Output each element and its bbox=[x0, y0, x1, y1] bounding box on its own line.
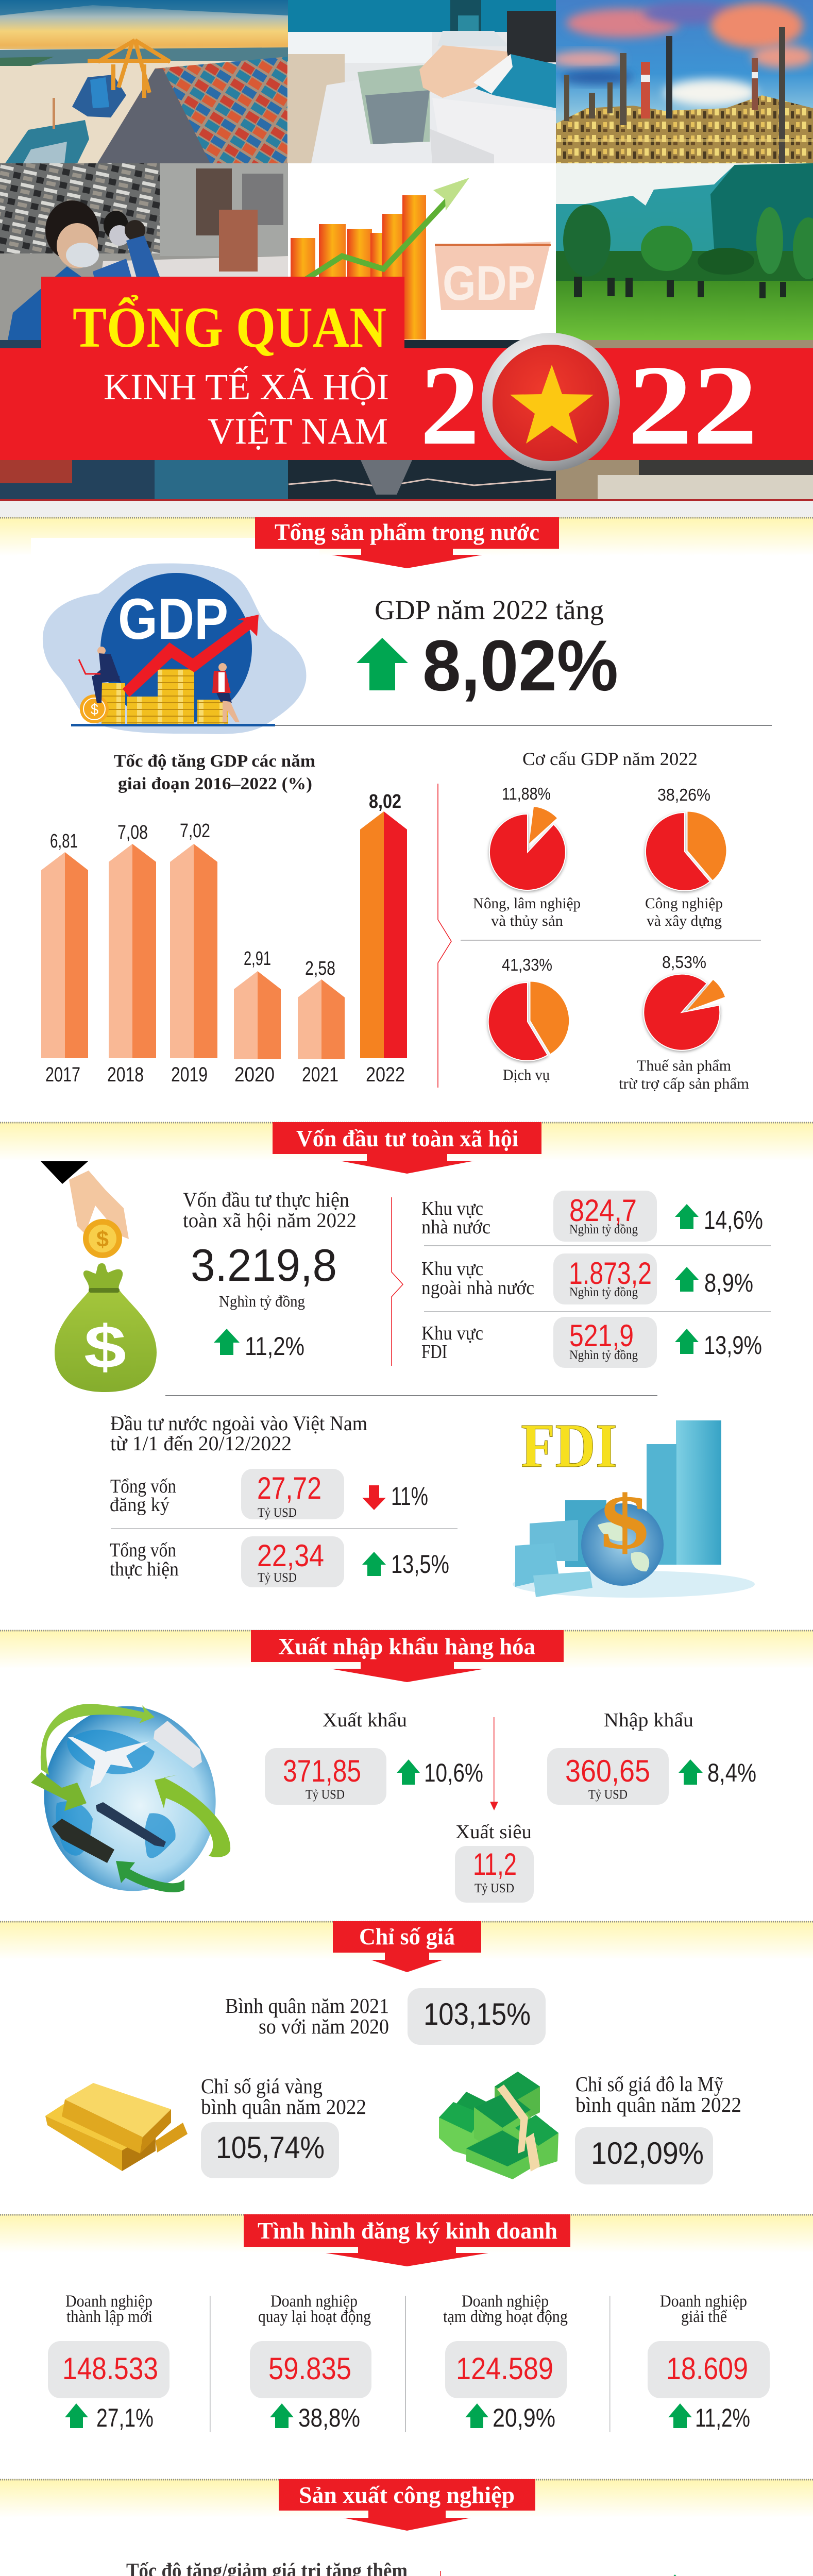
title band bbox=[0, 277, 813, 460]
block: exports: Xuất khẩu bbox=[323, 1709, 407, 1731]
row: FDI sector: 521,9 bbox=[569, 1318, 634, 1353]
row: state sector: Nghìn tỷ đồng bbox=[569, 1223, 638, 1236]
pie: industry: và xây dựng bbox=[647, 912, 722, 929]
illustration: FDI bars and globe bbox=[513, 1411, 755, 1598]
column: dissolved businesses: giải thể bbox=[681, 2308, 727, 2326]
bar: 2020 bbox=[234, 971, 281, 1059]
heading: GDP structure: Cơ cấu GDP năm 2022 bbox=[522, 749, 698, 769]
bar: 2022 bbox=[360, 811, 407, 1058]
bar values: 6,81 bbox=[50, 831, 78, 852]
bracket divider bbox=[392, 1197, 403, 1366]
bar values: 2,58 bbox=[305, 958, 335, 979]
block: imports: Nhập khẩu bbox=[604, 1709, 693, 1731]
pie: industry bbox=[645, 785, 726, 929]
row: FDI sector: 13,9% bbox=[704, 1331, 762, 1360]
pie: services: Dịch vụ bbox=[503, 1066, 550, 1083]
illustration: GDP growth with coins and people: $ bbox=[91, 701, 98, 718]
icon: flag medallion bbox=[482, 333, 620, 471]
column: returning businesses: 59.835 bbox=[268, 2351, 351, 2386]
column: suspended businesses: 20,9% bbox=[493, 2403, 555, 2432]
bar: 2017 bbox=[41, 852, 88, 1058]
column: suspended businesses: 124.589 bbox=[456, 2351, 553, 2386]
illustration: GDP growth with coins and people bbox=[43, 564, 306, 734]
block: gold index bbox=[201, 2074, 366, 2178]
photo: GDP chart bbox=[291, 178, 551, 340]
illustration: FDI bars and globe: $ bbox=[600, 1480, 649, 1565]
section heading: GDP: Tổng sản phẩm trong nước bbox=[275, 519, 539, 545]
column: returning businesses: 38,8% bbox=[298, 2403, 360, 2432]
section heading: industry: Sản xuất công nghiệp bbox=[299, 2482, 515, 2508]
section heading: trade bbox=[0, 1630, 813, 1682]
value: total investment: 3.219,8 bbox=[191, 1240, 337, 1291]
block: dollar index: Chỉ số giá đô la Mỹ bbox=[575, 2072, 723, 2096]
block: average CPI: 103,15% bbox=[424, 1997, 531, 2031]
pie: product taxes: Thuế sản phẩm bbox=[637, 1057, 731, 1074]
photo: container port bbox=[0, 0, 288, 163]
block: exports bbox=[265, 1709, 483, 1805]
block: imports bbox=[547, 1709, 756, 1805]
block: dollar index: bình quân năm 2022 bbox=[575, 2093, 741, 2116]
column: returning businesses: quay lại hoạt động bbox=[258, 2308, 371, 2326]
light strip under banner bbox=[0, 501, 813, 517]
block: dollar index: 102,09% bbox=[591, 2136, 704, 2171]
title: tong quan: TỔNG QUAN bbox=[73, 295, 386, 360]
icon: hand dropping coin into money bag: $ bbox=[84, 1313, 126, 1381]
pie: product taxes: trừ trợ cấp sản phẩm bbox=[619, 1075, 749, 1092]
row: disbursed capital: Tỷ USD bbox=[258, 1571, 297, 1585]
pie: industry: 38,26% bbox=[657, 785, 710, 804]
column: dissolved businesses: 18.609 bbox=[666, 2351, 748, 2386]
row: non-state sector: ngoài nhà nước bbox=[421, 1277, 534, 1299]
column: suspended businesses: Doanh nghiệp bbox=[462, 2292, 549, 2311]
column: new businesses: 148.533 bbox=[62, 2351, 158, 2386]
block: exports: 10,6% bbox=[424, 1758, 483, 1787]
row: non-state sector: 1.873,2 bbox=[569, 1256, 652, 1291]
text: GDP 2022 label: GDP năm 2022 tăng bbox=[375, 595, 604, 625]
section heading: business registration bbox=[0, 2214, 813, 2266]
section: industrial production bbox=[0, 2479, 813, 2576]
row: mining bbox=[487, 2573, 750, 2576]
text: FDI title: từ 1/1 đến 20/12/2022 bbox=[110, 1432, 292, 1455]
bar: 2019 bbox=[170, 844, 217, 1058]
bracket divider bbox=[438, 784, 451, 1088]
column: returning businesses: Doanh nghiệp bbox=[270, 2292, 358, 2311]
row: disbursed capital: 22,34 bbox=[257, 1538, 324, 1573]
icon: gold bars bbox=[45, 2083, 188, 2171]
text: FDI title: Đầu tư nước ngoài vào Việt Nam bbox=[110, 1412, 367, 1435]
block: exports: Tỷ USD bbox=[306, 1788, 345, 1802]
pie: services: 41,33% bbox=[502, 955, 552, 974]
section: total investment bbox=[0, 1122, 813, 1598]
row: registered capital: đăng ký bbox=[110, 1494, 170, 1516]
block: trade surplus: 11,2 bbox=[473, 1847, 517, 1882]
icon: hand dropping coin into money bag: $ bbox=[96, 1227, 109, 1252]
section: business registration bbox=[0, 2214, 813, 2432]
year labels: 2022 bbox=[366, 1063, 405, 1086]
row: non-state sector: Nghìn tỷ đồng bbox=[569, 1285, 638, 1299]
row: non-state sector bbox=[421, 1253, 753, 1304]
section heading: price index bbox=[0, 1921, 813, 1972]
block: gold index: Chỉ số giá vàng bbox=[201, 2074, 323, 2098]
row: FDI sector bbox=[421, 1317, 762, 1368]
column: suspended businesses: tạm dừng hoạt động bbox=[443, 2308, 568, 2326]
row: disbursed capital: thực hiện bbox=[110, 1558, 179, 1580]
bar values: 2,91 bbox=[244, 948, 271, 970]
row: disbursed capital bbox=[110, 1536, 449, 1587]
section heading: GDP bbox=[0, 517, 813, 568]
pie: product taxes: 8,53% bbox=[662, 953, 706, 972]
photo: rice field and mountains bbox=[556, 163, 813, 340]
value: investment growth: 11,2% bbox=[245, 1332, 304, 1361]
unit: total investment: Nghìn tỷ đồng bbox=[219, 1292, 305, 1310]
row: FDI sector: FDI bbox=[421, 1341, 447, 1363]
illustration: GDP growth with coins and people: GDP bbox=[118, 587, 228, 651]
year labels: 2020 bbox=[234, 1063, 275, 1086]
year labels bbox=[45, 1063, 405, 1086]
arrow: to trade surplus bbox=[490, 1717, 498, 1810]
column: dissolved businesses: Doanh nghiệp bbox=[660, 2292, 747, 2311]
bracket divider bbox=[441, 2571, 455, 2576]
block: average CPI: Bình quân năm 2021 bbox=[225, 1994, 389, 2018]
photo: garment factory workers bbox=[0, 163, 288, 340]
bar chart: GDP growth by year bbox=[41, 791, 407, 1086]
row: FDI sector: Nghìn tỷ đồng bbox=[569, 1348, 638, 1362]
column: suspended businesses bbox=[443, 2292, 568, 2432]
bar values: 7,02 bbox=[180, 820, 210, 842]
row: state sector: nhà nước bbox=[421, 1216, 490, 1238]
block: imports: 8,4% bbox=[707, 1758, 756, 1787]
block: trade surplus: Xuất siêu bbox=[455, 1821, 532, 1843]
block: trade surplus: Tỷ USD bbox=[475, 1882, 514, 1895]
year: last digits: 22 bbox=[628, 342, 758, 469]
pie: services bbox=[488, 955, 569, 1083]
year labels: 2021 bbox=[302, 1063, 338, 1086]
block: average CPI bbox=[225, 1988, 546, 2045]
column: new businesses: 27,1% bbox=[96, 2403, 154, 2432]
column: returning businesses bbox=[250, 2292, 371, 2432]
section heading: investment: Vốn đầu tư toàn xã hội bbox=[296, 1125, 518, 1151]
column: new businesses bbox=[48, 2292, 170, 2432]
text: investment title: Vốn đầu tư thực hiện bbox=[183, 1188, 349, 1211]
row: state sector: 14,6% bbox=[704, 1206, 763, 1234]
text: investment title bbox=[183, 1188, 357, 1232]
block: exports: 371,85 bbox=[283, 1754, 361, 1788]
heading: bar chart bbox=[114, 752, 315, 793]
icon: up arrow bbox=[214, 1329, 240, 1355]
rule under GDP headline bbox=[71, 724, 772, 726]
year labels: 2019 bbox=[171, 1063, 208, 1086]
pie: agriculture: và thủy sản bbox=[491, 912, 563, 929]
row: registered capital: 11% bbox=[391, 1482, 428, 1511]
heading: bar chart: Tốc độ tăng GDP các năm bbox=[114, 752, 315, 771]
bar values: 7,08 bbox=[117, 822, 148, 843]
column: new businesses: thành lập mới bbox=[66, 2308, 153, 2326]
year labels: 2017 bbox=[45, 1063, 80, 1086]
pie: agriculture bbox=[473, 784, 581, 929]
row: FDI sector: Khu vực bbox=[421, 1323, 483, 1344]
pie: product taxes bbox=[619, 953, 749, 1092]
row: non-state sector: 8,9% bbox=[704, 1268, 753, 1297]
icon: hand dropping coin into money bag bbox=[41, 1161, 157, 1392]
title: viet nam: VIỆT NAM bbox=[208, 411, 388, 452]
block: imports: Tỷ USD bbox=[588, 1788, 628, 1802]
row: disbursed capital: 13,5% bbox=[391, 1550, 449, 1579]
section heading: industry bbox=[0, 2479, 813, 2531]
icon: dollar stacks bbox=[439, 2072, 558, 2179]
illustration: globe with plane, truck and ships bbox=[27, 1690, 233, 1907]
column: dissolved businesses bbox=[648, 2292, 770, 2432]
bar values bbox=[50, 791, 401, 979]
illustration: FDI bars and globe: FDI bbox=[521, 1411, 617, 1481]
section: GDP bbox=[0, 517, 813, 1092]
bar: 2021 bbox=[298, 979, 345, 1059]
row: disbursed capital: Tổng vốn bbox=[110, 1539, 176, 1561]
block: imports: 360,65 bbox=[565, 1754, 650, 1788]
pie: industry: Công nghiệp bbox=[645, 895, 723, 912]
section heading: business registration: Tình hình đăng ký kinh doanh bbox=[258, 2217, 557, 2244]
photo strip behind title band bbox=[0, 340, 813, 499]
block: dollar index bbox=[575, 2072, 741, 2184]
text: FDI title bbox=[110, 1412, 367, 1455]
column: new businesses: Doanh nghiệp bbox=[65, 2292, 153, 2311]
year: first digit: 2 bbox=[420, 342, 480, 469]
text: investment title: toàn xã hội năm 2022 bbox=[183, 1209, 357, 1232]
photo: cash deposit bbox=[288, 0, 556, 163]
bar: 2018 bbox=[109, 844, 156, 1058]
photo: GDP chart: GDP bbox=[443, 256, 535, 311]
column: dissolved businesses: 11,2% bbox=[695, 2403, 750, 2432]
row: state sector: 824,7 bbox=[569, 1193, 637, 1228]
block: average CPI: so với năm 2020 bbox=[259, 2014, 389, 2038]
section: price index bbox=[0, 1921, 813, 2184]
row: registered capital bbox=[110, 1469, 428, 1520]
heading: bar chart: giai đoạn 2016–2022 (%) bbox=[118, 774, 312, 793]
row: registered capital: Tỷ USD bbox=[258, 1506, 297, 1520]
section: import export bbox=[0, 1630, 813, 1907]
icon: green up arrow bbox=[357, 638, 408, 690]
row: registered capital: Tổng vốn bbox=[110, 1476, 176, 1497]
photo: refinery at dusk bbox=[556, 0, 813, 163]
header: banner with photos and title bbox=[0, 0, 813, 517]
block: gold index: bình quân năm 2022 bbox=[201, 2095, 366, 2119]
value: GDP growth: 8,02% bbox=[422, 625, 618, 706]
row: state sector bbox=[421, 1191, 763, 1242]
section heading: price index: Chỉ số giá bbox=[359, 1923, 455, 1950]
year labels: 2018 bbox=[107, 1063, 144, 1086]
pie: agriculture: 11,88% bbox=[502, 784, 551, 803]
block: gold index: 105,74% bbox=[216, 2130, 325, 2165]
row: registered capital: 27,72 bbox=[257, 1471, 321, 1505]
row: non-state sector: Khu vực bbox=[421, 1258, 483, 1280]
pie: agriculture: Nông, lâm nghiệp bbox=[473, 895, 581, 912]
section heading: trade: Xuất nhập khẩu hàng hóa bbox=[278, 1633, 535, 1659]
section heading: investment bbox=[0, 1122, 813, 1174]
row: state sector: Khu vực bbox=[421, 1198, 483, 1219]
block: trade surplus bbox=[455, 1821, 534, 1903]
bar values: 8,02 bbox=[369, 791, 401, 812]
title: kinh te xa hoi: KINH TẾ XÃ HỘI bbox=[104, 366, 389, 408]
